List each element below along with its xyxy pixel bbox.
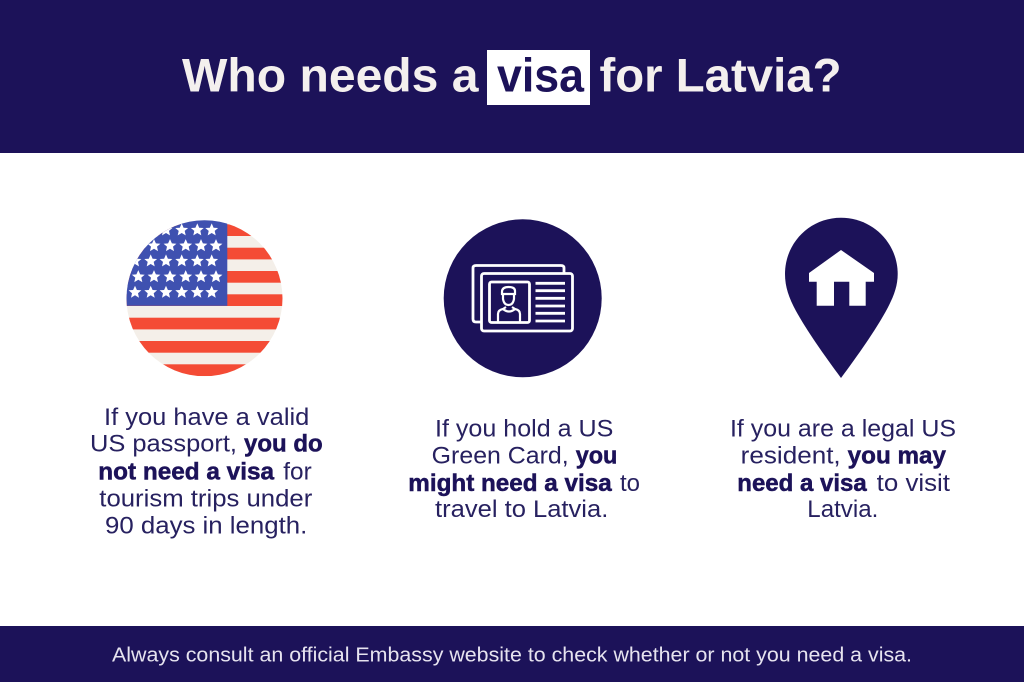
text: US passport <box>90 404 323 539</box>
text: US passport: for <box>283 458 312 485</box>
title: for Latvia? <box>600 49 842 102</box>
text: Green Card: to <box>620 470 640 497</box>
text: US passport: not need a visa <box>98 458 275 485</box>
icon: location pin with house <box>785 218 898 378</box>
text: legal resident <box>730 416 956 523</box>
text: Green Card: might need a visa <box>408 470 612 497</box>
footer note: Always consult an official Embassy website to check whether or not you need a visa. <box>112 644 912 666</box>
text: legal resident: need a visa <box>737 470 867 497</box>
text: legal resident: If you are a legal US <box>730 416 956 443</box>
icon: ID cards <box>444 219 602 377</box>
title <box>182 49 842 105</box>
text: legal resident: you may <box>848 442 947 469</box>
text: US passport: tourism trips under <box>99 486 312 513</box>
text: legal resident: to visit <box>877 470 950 497</box>
text: Green Card: travel to Latvia. <box>435 496 608 523</box>
text: Green Card: Green Card, <box>432 442 569 469</box>
text: legal resident: resident, <box>741 442 841 469</box>
icon: US flag <box>126 220 284 377</box>
header band <box>0 0 1024 153</box>
title: Who needs a <box>182 49 479 102</box>
text: Green Card: If you hold a US <box>435 416 613 443</box>
text: Green Card <box>408 416 640 523</box>
text: US passport: you do <box>244 431 323 458</box>
footer band <box>0 626 1024 682</box>
title: visa <box>497 49 585 102</box>
text: Green Card: you <box>576 442 617 469</box>
text: US passport: 90 days in length. <box>105 512 307 539</box>
text: US passport: If you have a valid <box>104 404 309 431</box>
text: US passport: US passport, <box>90 431 237 458</box>
text: legal resident: Latvia. <box>807 496 878 523</box>
